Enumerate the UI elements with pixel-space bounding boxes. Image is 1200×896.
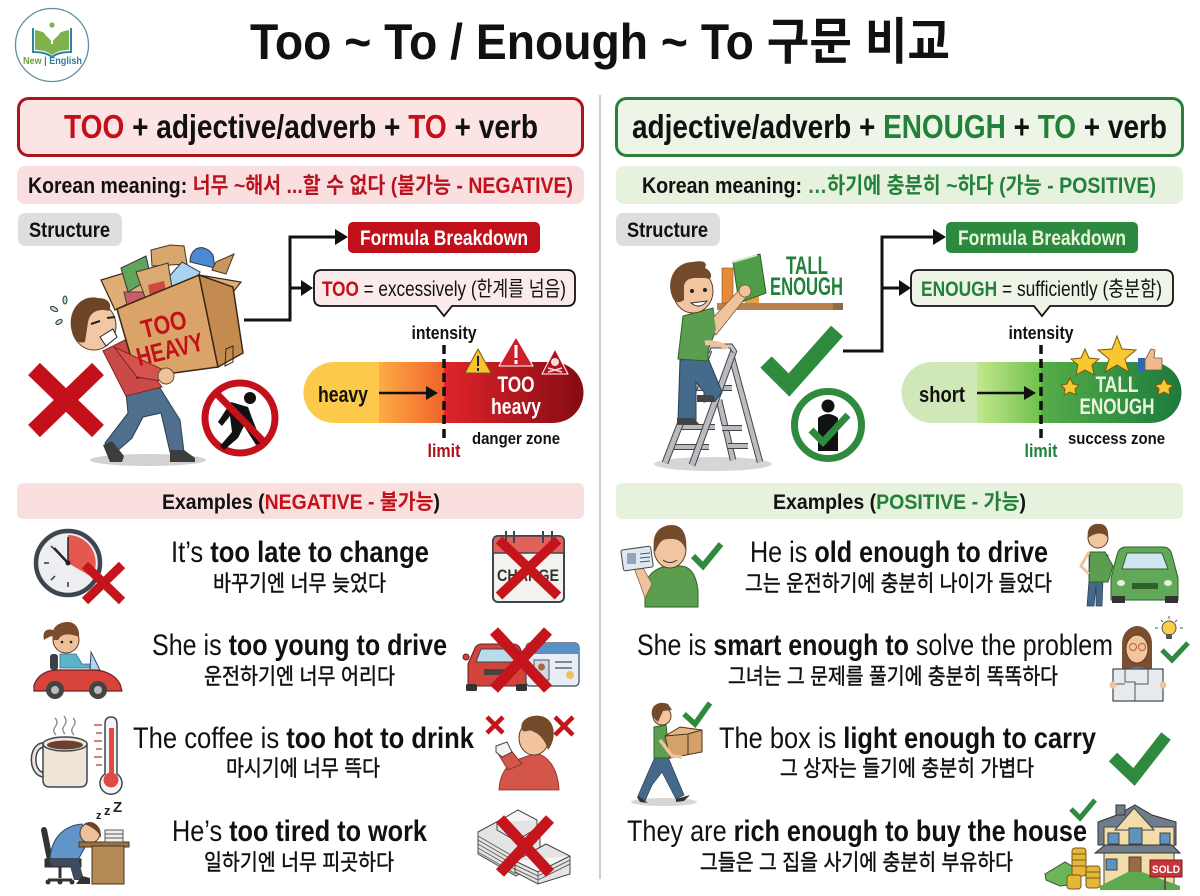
structure tag: enough xyxy=(616,213,720,246)
callout: too definition xyxy=(314,270,575,316)
icon: big red x xyxy=(34,369,98,431)
icon: person check badge xyxy=(794,392,862,458)
intensity scale: too: danger zone xyxy=(472,429,560,448)
example row: too tired xyxy=(44,799,570,884)
intensity scale: enough xyxy=(901,323,1181,461)
sentence: The coffee is too hot to drink xyxy=(133,722,474,755)
intensity scale: enough: TALL xyxy=(1096,372,1138,397)
structure tag: enough: Structure xyxy=(627,219,708,242)
icon: large check xyxy=(1113,736,1166,777)
logo: New | English xyxy=(23,55,82,67)
icon: clock xyxy=(36,531,100,595)
translation: 운전하기엔 너무 어리다 xyxy=(204,664,395,689)
icon: big green check xyxy=(766,331,837,385)
intensity scale: enough: short xyxy=(919,382,966,407)
icon: house, money and check xyxy=(1045,800,1182,890)
formula heading: too: TOO + adjective/adverb + TO + verb xyxy=(64,108,538,145)
sentence: He’s too tired to work xyxy=(172,815,427,848)
korean meaning: enough: Korean meaning: …하기에 충분히 ~하다 (가능 - POSITIVE) xyxy=(642,173,1156,198)
formula breakdown label: too xyxy=(348,222,540,253)
icon: crossed paper stacks xyxy=(478,810,570,884)
arrow: structure to formula xyxy=(843,229,946,351)
illustration: man carrying heavy box: HEAVY xyxy=(133,326,206,372)
intensity scale: enough: ENOUGH xyxy=(1080,394,1154,419)
icon: car and license crossed xyxy=(463,631,579,691)
icon: hot coffee and thermometer xyxy=(34,716,122,794)
example row: smart enough xyxy=(637,616,1188,701)
example row: rich enough xyxy=(627,800,1182,890)
examples header: negative xyxy=(17,483,584,519)
example row: too young xyxy=(34,622,579,699)
icon: red x xyxy=(85,565,122,601)
intensity scale: too: heavy xyxy=(491,394,542,419)
illustration: man carrying heavy box: TOO xyxy=(138,304,190,344)
korean meaning: too xyxy=(17,166,584,204)
structure tag: too: Structure xyxy=(29,219,110,242)
formula breakdown label: enough: Formula Breakdown xyxy=(958,227,1126,250)
intensity scale: enough: intensity xyxy=(1008,323,1074,343)
intensity scale: too: heavy xyxy=(318,382,369,407)
icon: man burned by coffee xyxy=(487,716,573,790)
callout: too definition: TOO = excessively (한계를 넘음) xyxy=(322,278,566,301)
logo xyxy=(16,8,88,82)
translation: 그들은 그 집을 사기에 충분히 부유하다 xyxy=(700,850,1013,875)
intensity scale: too: TOO xyxy=(498,372,534,397)
icon: house, money and check: SOLD xyxy=(1152,864,1180,876)
text: tall enough sign: TALL xyxy=(786,252,828,280)
sentence: They are rich enough to buy the house xyxy=(627,815,1087,848)
translation: 그녀는 그 문제를 풀기에 충분히 똑똑하다 xyxy=(728,664,1058,689)
icon: no carrying sign xyxy=(205,383,275,453)
sentence: The box is light enough to carry xyxy=(719,722,1096,755)
example row: old enough xyxy=(621,524,1178,607)
icon: tired man at desk: Z xyxy=(113,799,122,816)
panel: enough structure xyxy=(616,98,1183,471)
text: tall enough sign xyxy=(770,252,843,301)
examples header: positive xyxy=(616,483,1183,519)
sentence: She is smart enough to solve the problem xyxy=(637,629,1113,662)
icon: crossed calendar: CHANGE xyxy=(497,566,559,585)
example row: too hot xyxy=(34,716,573,794)
intensity scale: enough: success zone xyxy=(1068,429,1165,448)
center divider xyxy=(599,95,601,879)
icon: girl in red car xyxy=(34,622,122,699)
intensity scale: too: limit xyxy=(428,441,460,461)
formula breakdown label: too: Formula Breakdown xyxy=(360,227,528,250)
text: tall enough sign: ENOUGH xyxy=(770,273,843,301)
formula breakdown label: enough xyxy=(946,222,1138,253)
korean meaning: enough xyxy=(616,166,1183,204)
icon: tired man at desk: z xyxy=(104,803,111,818)
translation: 그 상자는 들기에 충분히 가볍다 xyxy=(780,756,1034,781)
korean meaning: too: Korean meaning: 너무 ~해서 ...할 수 없다 (불가능 - NEGATIVE) xyxy=(28,173,573,198)
arrow: structure to formula xyxy=(244,229,348,320)
icon: man carrying box xyxy=(631,703,710,806)
formula heading: enough xyxy=(616,98,1182,156)
illustration: man on ladder reaching shelf xyxy=(654,254,843,471)
structure tag: too xyxy=(18,213,122,246)
intensity scale: too: intensity xyxy=(412,323,476,343)
intensity scale: enough: limit xyxy=(1024,441,1058,461)
title: Too ~ To / Enough ~ To 구문 비교 xyxy=(250,14,950,70)
sentence: It’s too late to change xyxy=(171,536,429,569)
callout: enough definition: ENOUGH = sufficiently (충분함) xyxy=(921,278,1162,301)
icon: man with green car xyxy=(1081,524,1178,606)
examples header: positive: Examples (POSITIVE - 가능) xyxy=(773,491,1026,514)
icon: woman with puzzle and lightbulb xyxy=(1110,616,1188,701)
illustration: man carrying heavy box xyxy=(50,245,243,466)
icon: man with license xyxy=(621,525,721,607)
panel: too structure xyxy=(17,98,584,466)
icon: tired man at desk: z xyxy=(96,810,102,822)
translation: 일하기엔 너무 피곳하다 xyxy=(204,850,394,875)
example row: too late xyxy=(36,531,564,602)
callout: enough definition xyxy=(911,270,1173,316)
sentence: He is old enough to drive xyxy=(750,536,1048,569)
intensity scale: too xyxy=(303,323,584,461)
sentence: She is too young to drive xyxy=(152,629,447,662)
examples header: negative: Examples (NEGATIVE - 불가능) xyxy=(162,491,440,514)
formula heading: too xyxy=(18,98,582,156)
example row: light enough xyxy=(631,703,1166,806)
icon: tired man at desk xyxy=(44,799,129,884)
icon: crossed calendar xyxy=(493,531,564,602)
translation: 마시기에 너무 뜩다 xyxy=(226,756,380,781)
formula heading: enough: adjective/adverb + ENOUGH + TO + verb xyxy=(632,108,1167,145)
translation: 바꾸기엔 너무 늦었다 xyxy=(213,571,386,596)
translation: 그는 운전하기에 충분히 나이가 들었다 xyxy=(745,571,1052,596)
